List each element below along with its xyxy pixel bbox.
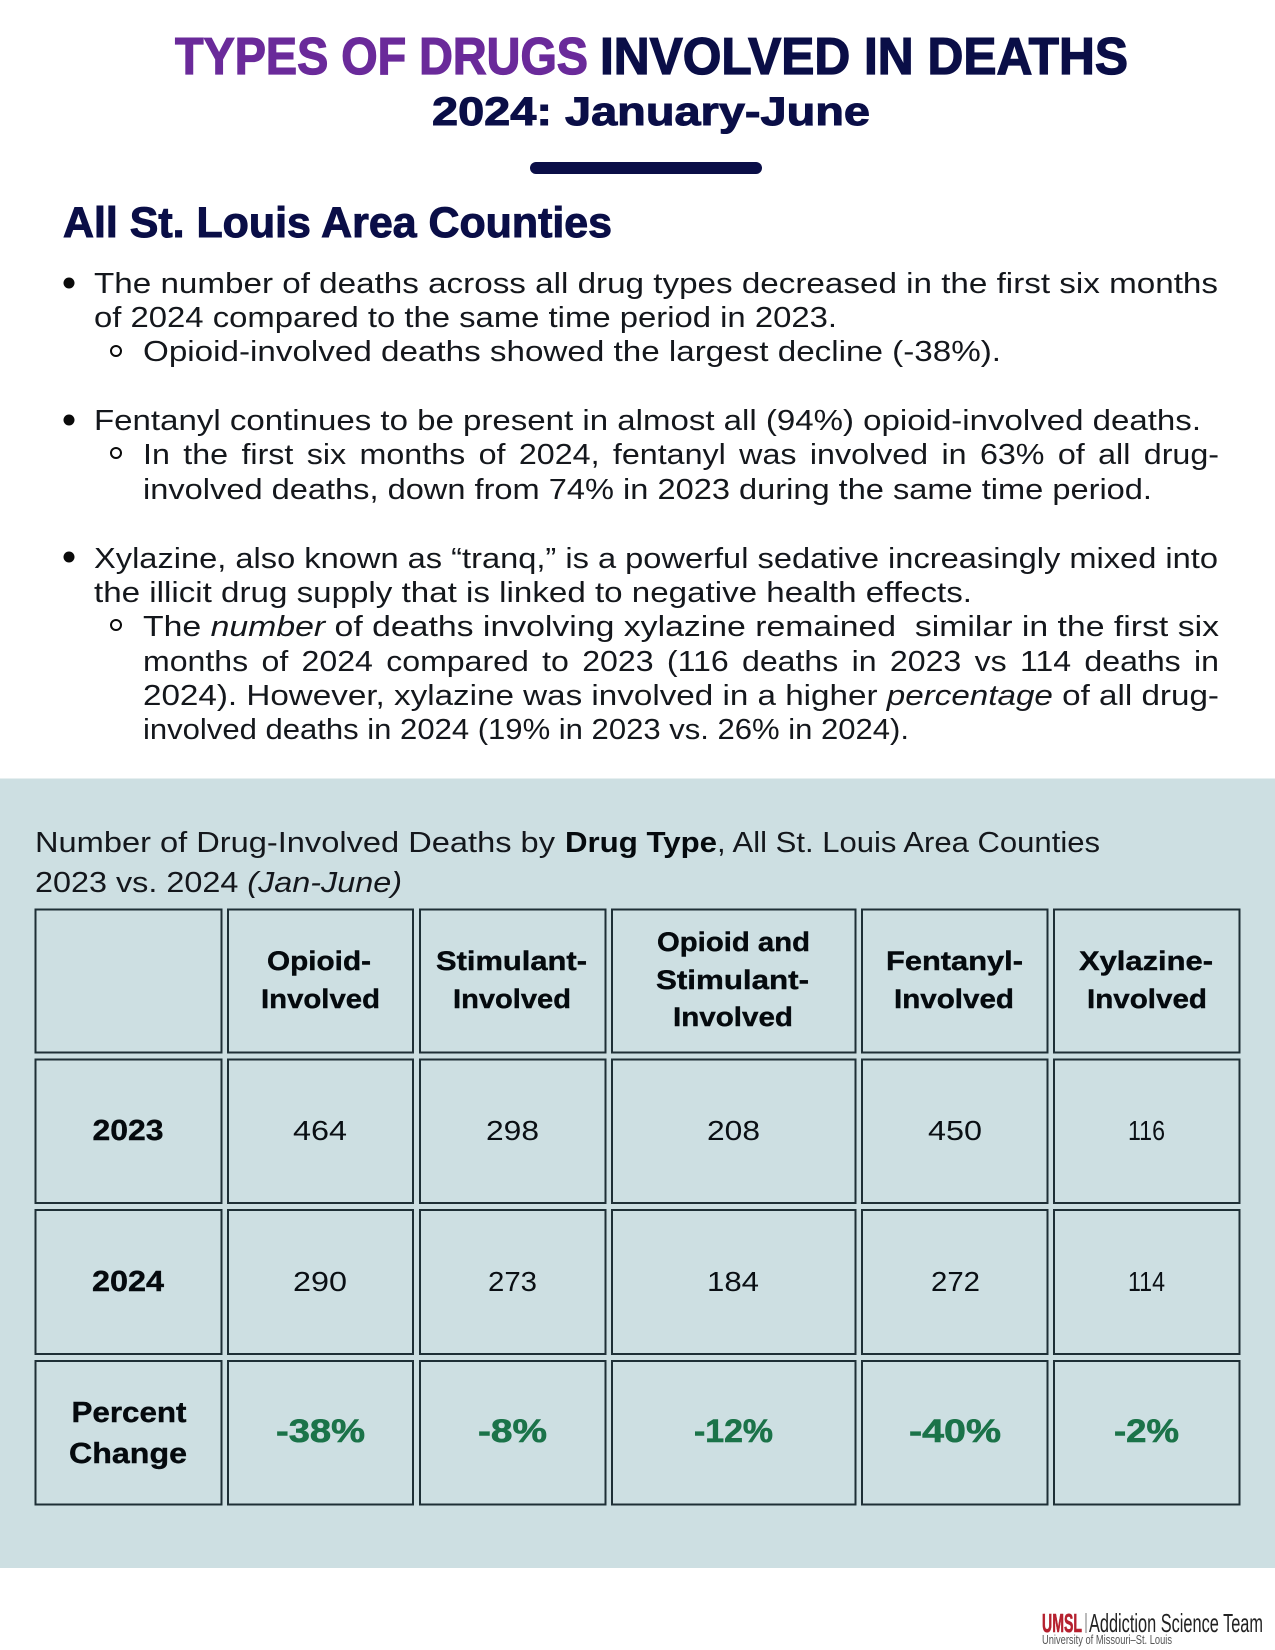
table caption: , All St. Louis Area Counties	[717, 827, 1100, 859]
bullet block: all drug types decreased: Opioid-involved deaths showed the largest decline (-38%).	[143, 336, 1001, 368]
header row: Involved	[453, 984, 571, 1014]
bullet block: xylazine: 2024). However, xylazine was involved in a higher percentage of all drug-	[143, 680, 1219, 712]
row: 2024: 290	[293, 1266, 347, 1297]
bullet block: all drug types decreased: of 2024 compared to the same time period in 2023.	[94, 302, 837, 334]
row: percent change: -8%	[478, 1413, 547, 1449]
table caption: Drug Type	[565, 827, 717, 859]
bullet block: xylazine: Xylazine, also known as “tranq,” is a powerful sedative increasingly mixed into	[94, 543, 1218, 575]
row: 2023: 116	[1128, 1115, 1165, 1146]
bullet block: fentanyl: Fentanyl continues to be present in almost all (94%) opioid-involved deaths.	[94, 405, 1201, 437]
header row: Involved	[894, 984, 1014, 1014]
title underline bar	[530, 162, 762, 174]
row: 2024: 272	[931, 1266, 980, 1297]
panel: data table background	[0, 778, 1275, 1568]
header row: Involved	[261, 984, 380, 1014]
row: 2024: 273	[488, 1266, 537, 1297]
logo: UMSL Addiction Science Team: UMSL	[1042, 1608, 1082, 1638]
row: 2024: 184	[707, 1266, 759, 1297]
row: 2024: 2024	[92, 1266, 164, 1298]
row: percent change: -12%	[694, 1413, 773, 1449]
row: percent change	[36, 1361, 1240, 1504]
bullet block: all drug types decreased	[64, 268, 1218, 368]
header row: Stimulant-	[656, 965, 809, 995]
header row: Opioid-	[267, 946, 371, 976]
row: 2023: 450	[928, 1115, 982, 1146]
header row: Fentanyl-	[886, 946, 1023, 976]
bullet block: fentanyl: In the first six months of 2024, fentanyl was involved in 63% of all drug-	[143, 439, 1219, 471]
row: percent change: -2%	[1114, 1413, 1179, 1449]
title: INVOLVED IN DEATHS	[600, 28, 1128, 86]
table caption: Number of Drug-Involved Deaths by	[35, 827, 556, 859]
row: 2023: 464	[293, 1115, 347, 1146]
logo: UMSL Addiction Science Team: University of Missouri–St. Louis	[1042, 1632, 1172, 1647]
bullet block: fentanyl	[64, 405, 1219, 506]
header row: Involved	[1087, 984, 1207, 1014]
row: percent change: Change	[69, 1438, 187, 1470]
bullet block: xylazine: involved deaths in 2024 (19% in 2023 vs. 26% in 2024).	[143, 714, 909, 746]
bullet block: all drug types decreased: The number of deaths across all drug types decreased in the first six months	[94, 268, 1218, 300]
row: percent change: -40%	[909, 1413, 1001, 1449]
bullet block: xylazine: The number of deaths involving xylazine remained similar in the first six	[143, 611, 1220, 643]
logo: UMSL Addiction Science Team	[1042, 1608, 1263, 1647]
bullet block: xylazine: the illicit drug supply that is linked to negative health effects.	[94, 577, 972, 609]
data table	[36, 910, 1240, 1504]
header row: Stimulant-	[436, 946, 587, 976]
title	[175, 28, 1128, 86]
table caption: 2023 vs. 2024 (Jan-June)	[35, 867, 402, 899]
header row: Involved	[673, 1002, 793, 1032]
row: percent change: Percent	[72, 1397, 187, 1429]
section heading: All St. Louis Area Counties	[63, 199, 612, 247]
header row	[36, 910, 1240, 1052]
header row: Xylazine-	[1079, 946, 1213, 976]
bullet block: xylazine	[64, 543, 1220, 746]
row: 2023: 2023	[92, 1115, 164, 1147]
table caption	[35, 827, 1100, 899]
row: 2023: 208	[707, 1115, 760, 1146]
title: TYPES OF DRUGS	[175, 28, 588, 86]
row: 2024: 114	[1128, 1266, 1165, 1297]
row: 2023: 298	[486, 1115, 539, 1146]
row: 2024	[36, 1210, 1240, 1354]
bullet block: fentanyl: involved deaths, down from 74% in 2023 during the same time period.	[143, 474, 1152, 506]
row: percent change: -38%	[276, 1413, 365, 1449]
row: 2023	[36, 1060, 1240, 1203]
header row: Opioid and	[657, 927, 810, 957]
bullet block: xylazine: months of 2024 compared to 2023 (116 deaths in 2023 vs 114 deaths in	[143, 646, 1219, 678]
subtitle: 2024: January-June	[432, 90, 870, 134]
